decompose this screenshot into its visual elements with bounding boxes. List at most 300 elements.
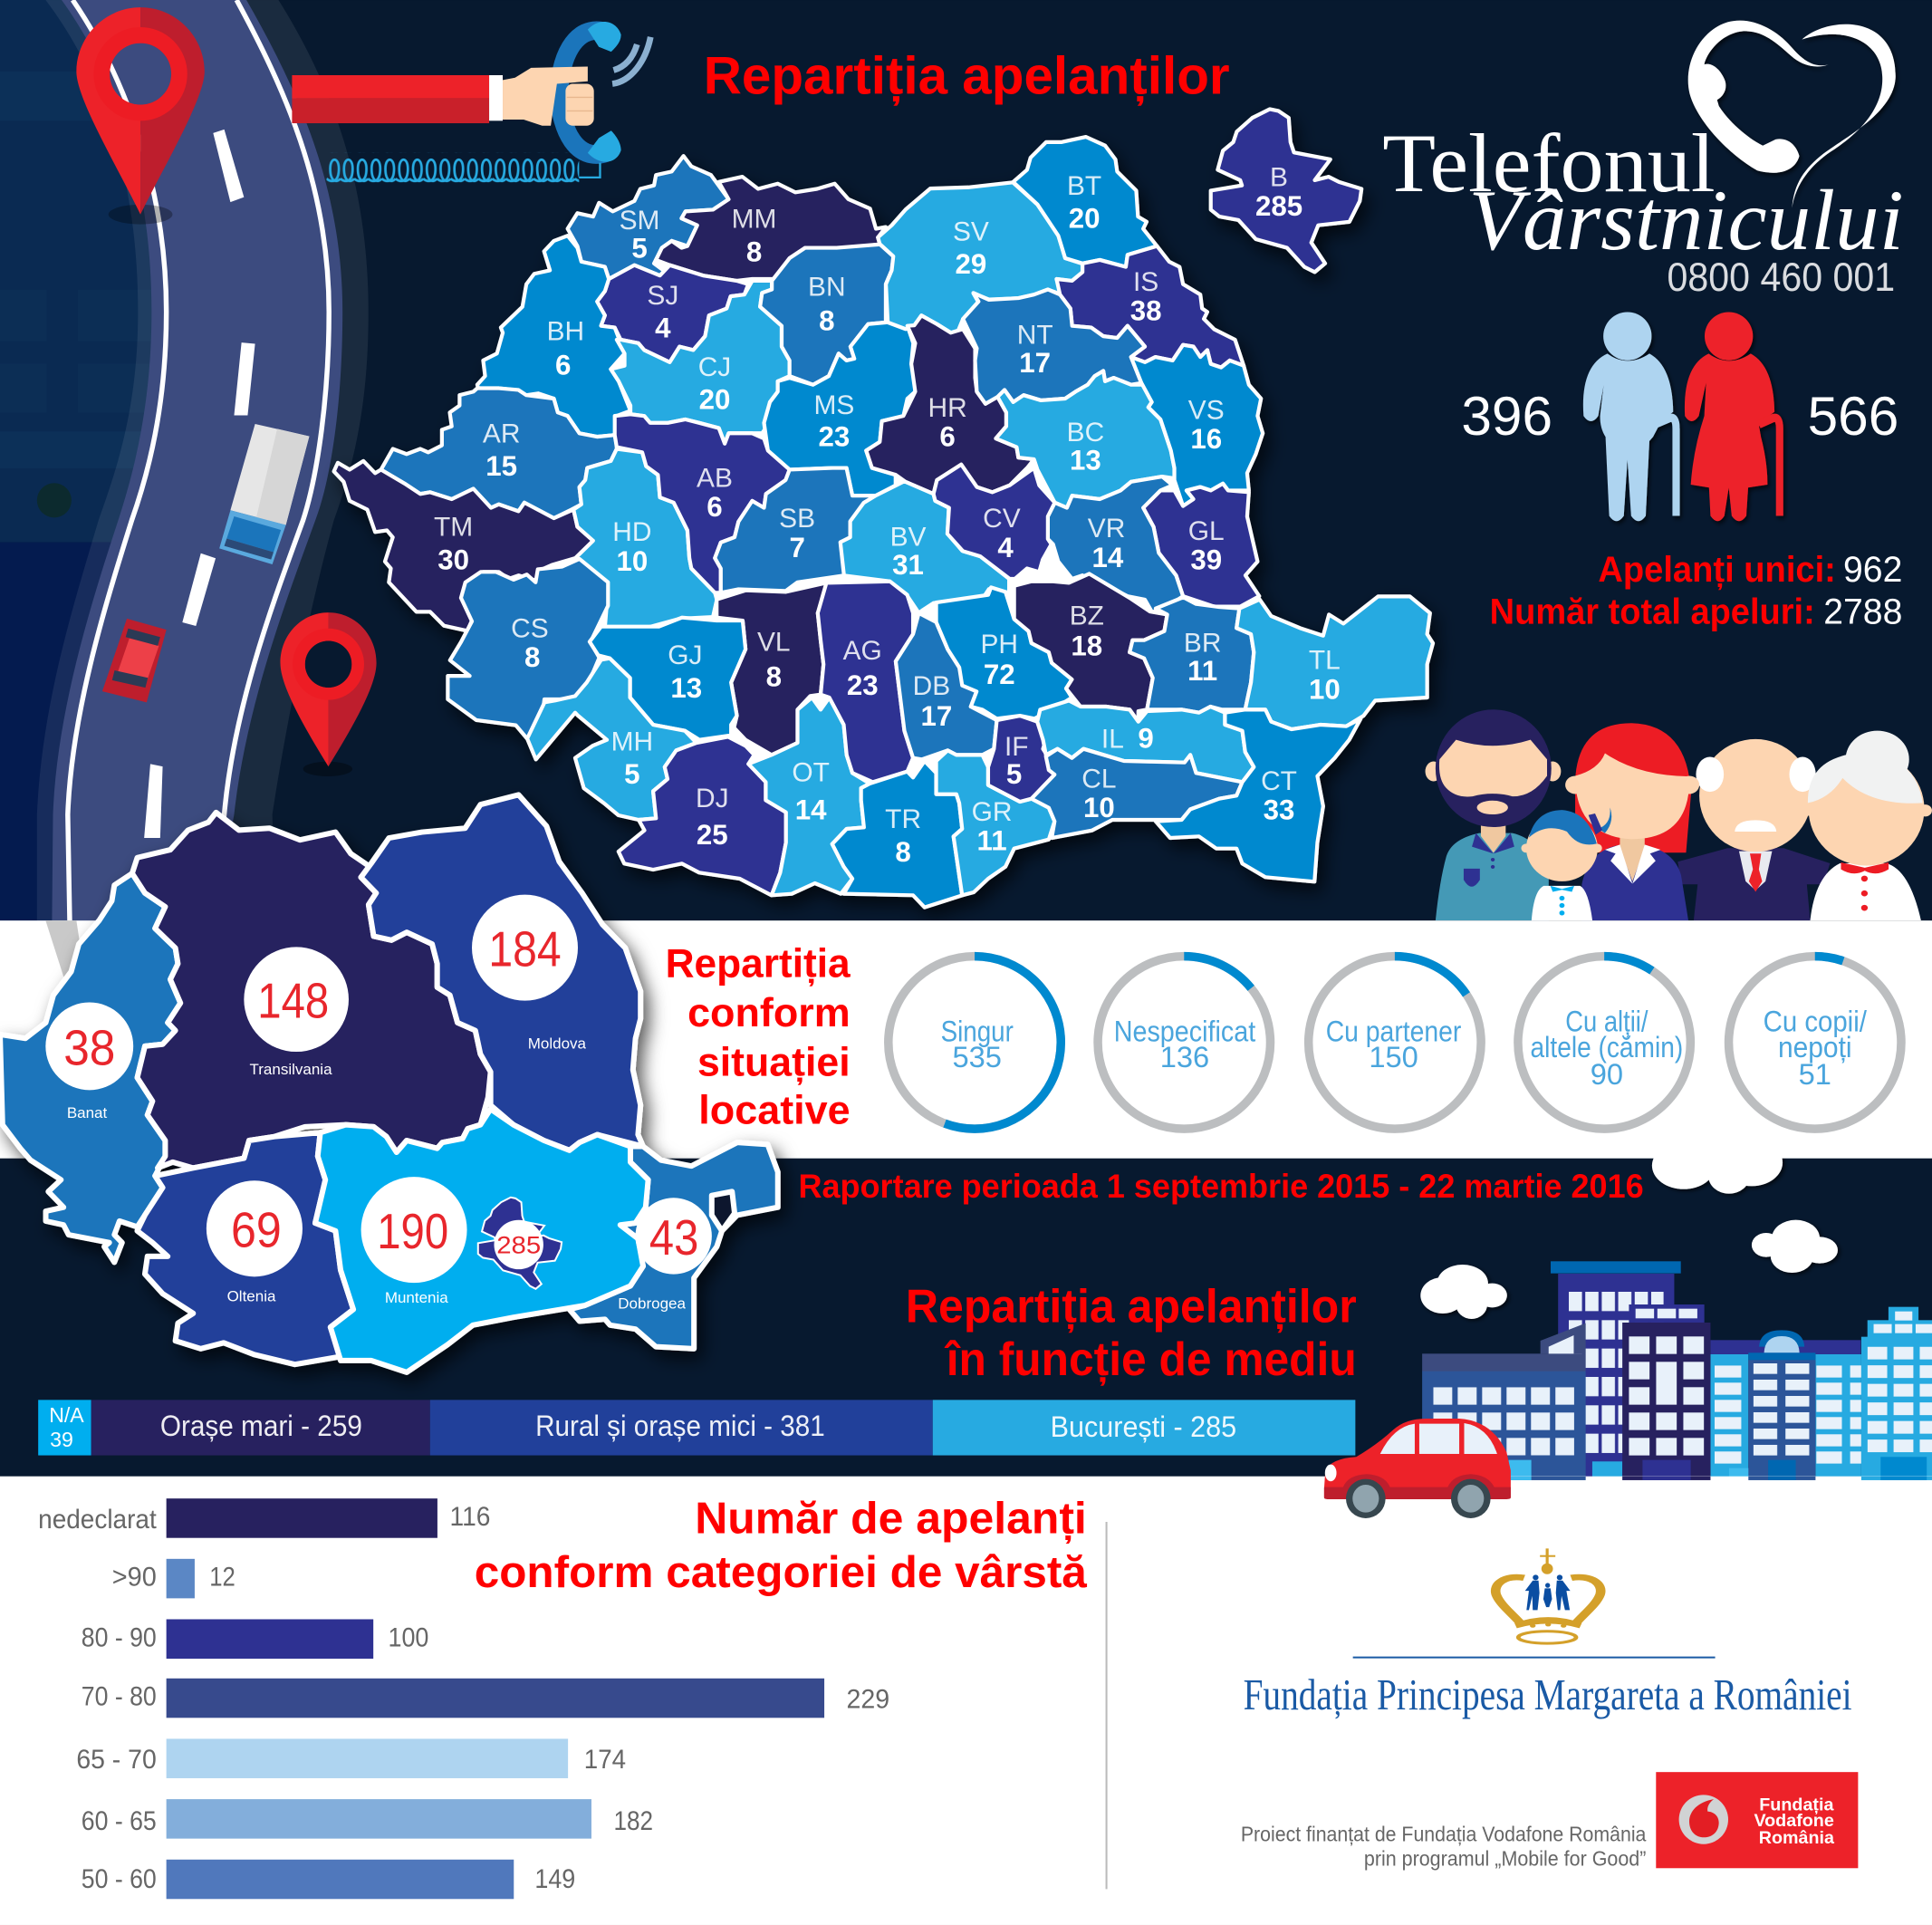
- county: VS: [1131, 345, 1263, 506]
- county: DB: [896, 613, 997, 759]
- region value: Dobrogea: Dobrogea: [618, 1295, 686, 1313]
- red haired woman: [1565, 723, 1699, 920]
- label: CS: CS: [511, 613, 549, 643]
- label: B: [1255, 162, 1302, 222]
- county: MM: [656, 177, 886, 281]
- label: HD: [612, 517, 651, 577]
- heading: housing situation: situației: [697, 1039, 851, 1085]
- bar: nedeclarat: [38, 1498, 490, 1538]
- label: BT: [1067, 171, 1101, 235]
- illustration: family group: [1426, 709, 1932, 920]
- logo: Vodafone foundation: [1656, 1772, 1858, 1868]
- label: MS: 23: [819, 420, 850, 452]
- county: GR: [937, 750, 1054, 895]
- county: SV: [878, 182, 1082, 332]
- icon: arm holding telephone: [292, 22, 650, 182]
- brand name: Telefonul: Telefonul: [1382, 118, 1716, 210]
- label: HD: 10: [616, 545, 648, 577]
- female caller count: 566: [1808, 386, 1898, 447]
- project credit: prin programul „Mobile for Good”: [1364, 1847, 1646, 1871]
- label: MH: 5: [624, 758, 640, 790]
- segment: Orase mari: [91, 1400, 430, 1456]
- region value: Moldova: Moldova: [528, 1035, 587, 1053]
- label: SJ: [647, 281, 678, 344]
- logo: Vodafone foundation: România: [1759, 1828, 1835, 1848]
- label: TR: TR: [885, 804, 921, 834]
- label: HR: 6: [939, 420, 956, 452]
- heading: housing situation: Repartiția: [666, 940, 851, 987]
- region value: Bucharest inset: 285: [496, 1230, 541, 1258]
- bar: 50-60: [82, 1860, 575, 1899]
- county: GJ: [590, 618, 745, 740]
- heading: housing situation: conform: [687, 989, 851, 1035]
- county: BT: [1014, 137, 1157, 267]
- county: CV: [934, 465, 1055, 579]
- label: AG: 23: [847, 669, 879, 701]
- county: GL: [1143, 484, 1259, 607]
- label: SJ: SJ: [647, 281, 678, 311]
- label: BN: BN: [808, 272, 846, 302]
- label: SB: SB: [779, 504, 815, 534]
- label: MH: [611, 727, 653, 790]
- map of Romania by county: [334, 109, 1433, 908]
- label: BC: 13: [1070, 444, 1101, 476]
- heading: callers by age: conform categoriei de vârstă: [475, 1548, 1088, 1597]
- label: CS: [511, 613, 549, 673]
- label: TM: [434, 513, 473, 575]
- region value: Dobrogea: [618, 1198, 712, 1313]
- region value: Oltenia: 69: [231, 1203, 282, 1258]
- label: CV: [983, 504, 1021, 563]
- environment bar: [38, 1400, 1355, 1456]
- county: BV: [841, 482, 1009, 613]
- county: TM: [334, 461, 593, 630]
- county: IL: [1037, 700, 1254, 782]
- label: AB: AB: [697, 463, 733, 493]
- label: SM: 5: [631, 232, 648, 264]
- ring: Cu copii: Cu copii/: [1764, 1005, 1868, 1038]
- child: [1522, 807, 1611, 920]
- region value: Dobrogea: 43: [649, 1210, 698, 1266]
- region value: Oltenia: Oltenia: [227, 1288, 276, 1305]
- county: CS: [447, 559, 608, 738]
- label: GR: GR: [972, 797, 1012, 827]
- stat: unique callers: Apelanți unici:: [1598, 550, 1836, 590]
- label: IL: 9: [1138, 723, 1154, 755]
- project credit: Proiect finanțat de Fundația Vodafone România: [1241, 1822, 1647, 1845]
- county: TR: [832, 761, 962, 908]
- label: BC: BC: [1067, 418, 1104, 448]
- stat: unique callers: 962: [1843, 550, 1902, 590]
- ring: Cu altii: altele (cămin): [1531, 1030, 1683, 1064]
- ring: Cu altii: 90: [1591, 1057, 1623, 1091]
- label: IS: IS: [1133, 267, 1158, 297]
- region value: Transilvania: Transilvania: [250, 1061, 332, 1078]
- bar: nedeclarat: 116: [450, 1502, 490, 1532]
- label: NT: 17: [1019, 347, 1051, 379]
- label: SB: 7: [789, 532, 805, 563]
- label: TL: [1309, 646, 1341, 705]
- segment: N/A: N/A: [49, 1403, 84, 1427]
- logo: heart with phone handset: [1688, 21, 1896, 208]
- label: SV: SV: [953, 217, 989, 246]
- segment: Orase mari: Orașe mari - 259: [160, 1409, 362, 1442]
- bar: nedeclarat: nedeclarat: [38, 1505, 157, 1535]
- label: BZ: BZ: [1070, 602, 1104, 631]
- heading: callers by environment: [906, 1280, 1357, 1386]
- label: AG: AG: [843, 636, 882, 666]
- label: BZ: [1070, 602, 1104, 662]
- bar: 50-60: 50 - 60: [82, 1864, 157, 1894]
- label: GL: 39: [1190, 544, 1222, 575]
- label: DB: DB: [913, 671, 950, 701]
- label: VS: [1188, 396, 1225, 455]
- county: IF: [988, 716, 1054, 802]
- label: CJ: [698, 352, 731, 416]
- label: VR: [1088, 514, 1125, 573]
- label: BV: BV: [890, 523, 927, 553]
- segment: Bucuresti: București - 285: [1051, 1410, 1236, 1443]
- label: IS: [1130, 267, 1161, 327]
- label: SM: SM: [620, 206, 659, 236]
- label: CJ: CJ: [698, 352, 731, 382]
- building: back strip: [1710, 1340, 1860, 1477]
- Razim lake notch: [712, 1191, 735, 1231]
- region value: Oltenia: [207, 1180, 303, 1305]
- phone number: 0800 460 001: [1668, 254, 1895, 300]
- label: SB: [779, 504, 815, 563]
- bar: over 90: 12: [209, 1563, 235, 1593]
- mini Bucharest shape: [478, 1198, 562, 1289]
- ring: Cu copii: [1729, 957, 1901, 1129]
- label: AB: 6: [706, 491, 723, 523]
- bar: 70-80: [82, 1679, 889, 1718]
- ring: Cu copii: 51: [1799, 1057, 1831, 1091]
- region value: Banat: 38: [63, 1020, 115, 1075]
- label: TR: [885, 804, 921, 868]
- label: GL: [1188, 516, 1225, 575]
- bar: 80-90: 100: [389, 1622, 428, 1652]
- label: VS: VS: [1188, 396, 1225, 426]
- label: TR: 8: [895, 836, 911, 868]
- heading: callers by environment: Repartiția apelanților: [906, 1280, 1357, 1333]
- county: BZ: [1014, 573, 1168, 722]
- county: PH: [937, 587, 1072, 718]
- label: BV: [890, 523, 927, 581]
- label: AG: [843, 636, 882, 701]
- stat: total calls: Număr total apeluri:: [1490, 592, 1815, 631]
- city backdrop behind road: [0, 0, 167, 924]
- bar: 80-90: 80 - 90: [82, 1622, 157, 1652]
- label: SM: [620, 206, 659, 264]
- region: Moldova: [361, 794, 643, 1150]
- red car on road: [102, 619, 167, 702]
- label: BT: 20: [1069, 203, 1100, 235]
- building: left block: [1422, 1323, 1586, 1480]
- label: AR: 15: [485, 450, 517, 482]
- label: TM: 30: [437, 544, 469, 575]
- regional map: [0, 794, 778, 1372]
- region: Oltenia: [138, 1132, 353, 1364]
- region value: Moldova: 184: [488, 922, 562, 977]
- region value: Muntenia: [361, 1177, 467, 1306]
- bar: 50-60: 149: [534, 1864, 575, 1894]
- label: IF: [1004, 732, 1029, 790]
- label: IS: 38: [1130, 295, 1161, 327]
- label: HD: HD: [612, 517, 651, 547]
- label: BH: BH: [547, 316, 584, 346]
- region value: Muntenia: 190: [377, 1204, 448, 1259]
- label: CL: 10: [1083, 792, 1115, 823]
- bar: over 90: >90: [112, 1563, 157, 1593]
- county: MH: [527, 659, 697, 820]
- county: IS: [1056, 246, 1244, 368]
- region value: Moldova: [472, 895, 587, 1053]
- county: TL: [1236, 596, 1433, 729]
- ring: Cu partener: 150: [1369, 1040, 1418, 1073]
- label: TL: TL: [1309, 646, 1341, 676]
- label: AR: [483, 419, 520, 482]
- ring: Cu altii: Cu alții/: [1565, 1005, 1648, 1038]
- region value: Muntenia: Muntenia: [385, 1289, 448, 1306]
- ring: Singur: Singur: [941, 1014, 1014, 1047]
- building: domed tower: [1748, 1330, 1861, 1480]
- label: SJ: 4: [655, 313, 671, 344]
- label: GJ: 13: [670, 672, 702, 704]
- label: OT: OT: [792, 757, 830, 787]
- bar: 65-70: 174: [584, 1745, 626, 1775]
- region value: Banat: Banat: [67, 1104, 108, 1121]
- label: MM: MM: [732, 205, 776, 235]
- truck on road: [219, 424, 309, 564]
- label: DB: 17: [920, 700, 952, 732]
- ring: Singur: [889, 957, 1061, 1129]
- bearded man: [1426, 709, 1561, 920]
- bar: over 90: [112, 1559, 235, 1598]
- label: VR: 14: [1092, 542, 1124, 573]
- label: HR: [928, 393, 967, 452]
- region value: Bucharest inset: [494, 1220, 543, 1269]
- map pin large: [76, 7, 205, 225]
- label: BT: BT: [1067, 171, 1101, 201]
- label: IF: IF: [1004, 732, 1029, 762]
- label: CT: [1261, 766, 1297, 826]
- county: SB: [715, 468, 876, 592]
- label: OT: [792, 757, 830, 826]
- label: PH: [980, 630, 1018, 690]
- male caller count: 396: [1461, 386, 1552, 447]
- county: CT: [1156, 709, 1360, 881]
- label: BV: 31: [892, 549, 924, 581]
- region: Banat: [0, 873, 180, 1262]
- bar: 60-65: [82, 1799, 653, 1839]
- county: VL: [716, 582, 826, 755]
- label: HR: HR: [928, 393, 967, 423]
- road fade on white band: [45, 920, 86, 986]
- ring: Cu altii: [1518, 957, 1690, 1129]
- cloud top: [1652, 1135, 1783, 1194]
- county: AB: [615, 414, 790, 592]
- building: navy tower: [1622, 1304, 1710, 1480]
- cloud left: [1420, 1265, 1507, 1319]
- building: back tower: [1551, 1261, 1681, 1477]
- label: MM: 8: [746, 236, 762, 267]
- ring: Nespecificat: Nespecificat: [1114, 1014, 1255, 1047]
- label: PH: PH: [980, 630, 1018, 659]
- heading: callers by environment: în funcție de mediu: [944, 1333, 1357, 1386]
- label: BC: [1067, 418, 1104, 476]
- county: VR: [1048, 476, 1183, 611]
- label: GR: [972, 797, 1012, 857]
- county: HR: [866, 315, 1034, 494]
- label: SV: 29: [956, 248, 986, 280]
- icon: elderly man and woman: [1583, 312, 1780, 521]
- old man: [1677, 739, 1830, 920]
- segment: Rural: Rural și orașe mici - 381: [535, 1409, 825, 1442]
- label: BZ: 18: [1071, 630, 1102, 662]
- county: BN: [760, 245, 894, 385]
- county: AR: [381, 389, 617, 518]
- label: VL: 8: [766, 661, 782, 693]
- label: TM: TM: [434, 513, 473, 543]
- label: DJ: 25: [697, 819, 728, 851]
- ring: Singur: 535: [953, 1040, 1002, 1073]
- icon: red car: [1324, 1419, 1511, 1518]
- region: Transilvania: [132, 813, 491, 1168]
- label: CV: CV: [983, 504, 1021, 534]
- cloud right: [1752, 1220, 1838, 1273]
- bar: 65-70: [76, 1738, 626, 1778]
- label: IF: 5: [1006, 758, 1022, 790]
- label: TL: 10: [1309, 673, 1341, 705]
- bar: 60-65: 60 - 65: [82, 1806, 157, 1836]
- county: BC: [995, 371, 1175, 508]
- label: GJ: GJ: [668, 640, 702, 670]
- label: B: B: [1270, 162, 1288, 192]
- segment: N/A: 39: [50, 1428, 73, 1451]
- bar: 60-65: 182: [613, 1806, 653, 1836]
- county: SM: [568, 156, 728, 279]
- reporting period: Raportare perioada 1 septembrie 2015 - 22 martie 2016: [798, 1168, 1644, 1205]
- label: VL: [757, 627, 791, 693]
- county: CJ: [610, 281, 790, 444]
- label: CT: 33: [1264, 794, 1294, 826]
- region value: Transilvania: 148: [257, 974, 329, 1029]
- heading: callers by age: [475, 1494, 1088, 1597]
- county: OT: [748, 698, 870, 895]
- label: IL: IL: [1101, 725, 1124, 755]
- region: Muntenia: [315, 1109, 649, 1372]
- label: CS: 8: [524, 641, 540, 673]
- label: CL: [1081, 764, 1117, 823]
- ring: Nespecificat: 136: [1160, 1040, 1209, 1073]
- bar: 70-80: 229: [847, 1684, 889, 1714]
- region value: Banat: [45, 1003, 133, 1121]
- label: NT: NT: [1017, 321, 1053, 351]
- white band: housing situation: [0, 920, 1932, 1159]
- label: NT: [1017, 321, 1053, 379]
- white footer panel: [0, 1477, 1932, 1925]
- city skyline: [1420, 1220, 1932, 1480]
- county: MS: [764, 322, 915, 496]
- label: CV: 4: [997, 532, 1014, 563]
- logo: Vodafone foundation: Vodafone: [1754, 1811, 1834, 1831]
- label: AB: [697, 463, 733, 523]
- logo: crown: [1495, 1548, 1600, 1643]
- segment: Bucuresti: [933, 1400, 1355, 1456]
- county: BR: [1129, 598, 1254, 713]
- county: NT: [963, 289, 1145, 404]
- region: Dobrogea: [570, 1142, 778, 1349]
- label: MM: [732, 205, 776, 267]
- county: DJ: [619, 736, 786, 895]
- city ground cover: [1422, 1477, 1932, 1480]
- county: HD: [573, 449, 716, 628]
- heading: housing situation: locative: [698, 1087, 851, 1133]
- label: SV: [953, 217, 989, 280]
- label: MS: [814, 390, 854, 452]
- label: BN: [808, 272, 846, 337]
- label: VL: VL: [757, 627, 791, 657]
- heading: housing situation: [666, 940, 851, 1133]
- label: BH: 6: [555, 350, 571, 381]
- bar chart: callers by age: [38, 1498, 889, 1899]
- county labels: [434, 162, 1341, 868]
- bar: 70-80: 70 - 80: [82, 1682, 157, 1712]
- title: Repartiția apelanților: [704, 46, 1230, 106]
- county: B (Bucharest): [1211, 109, 1361, 272]
- project credit: [1241, 1822, 1647, 1871]
- map pin small: [280, 612, 377, 776]
- heading: callers by age: Număr de apelanți: [695, 1494, 1087, 1543]
- label: B: 285: [1255, 190, 1302, 222]
- ring: Cu partener: [1309, 957, 1481, 1129]
- label: GJ: [668, 640, 702, 704]
- label: VR: VR: [1088, 514, 1125, 544]
- label: BH: [547, 316, 584, 381]
- label: CL: CL: [1081, 764, 1117, 794]
- label: BR: 11: [1187, 655, 1217, 687]
- label: BR: [1184, 629, 1221, 687]
- label: OT: 14: [795, 794, 827, 826]
- county: AG: [818, 582, 913, 782]
- stat: total calls: 2788: [1823, 592, 1902, 631]
- label: MH: MH: [611, 727, 653, 756]
- label: IL: [1101, 723, 1154, 755]
- county: BH: [477, 236, 630, 437]
- brand name: Vârstnicului: Vârstnicului: [1469, 172, 1904, 268]
- label: GL: GL: [1188, 516, 1225, 546]
- logo: Vodafone foundation: Fundația: [1759, 1795, 1834, 1814]
- label: AR: AR: [483, 419, 520, 448]
- label: DJ: DJ: [696, 784, 729, 813]
- label: VS: 16: [1190, 423, 1222, 455]
- ring: Cu partener: Cu partener: [1326, 1014, 1461, 1047]
- segment: N/A: [38, 1400, 91, 1456]
- label: CJ: 20: [699, 384, 730, 416]
- label: BN: 8: [819, 305, 834, 337]
- bar: 80-90: [82, 1619, 428, 1659]
- label: GR: 11: [977, 825, 1007, 857]
- label: DJ: [696, 784, 729, 851]
- label: MS: MS: [814, 390, 854, 420]
- road: [37, 0, 369, 948]
- old woman: [1799, 731, 1932, 920]
- region value: Transilvania: [244, 947, 349, 1078]
- label: BR: BR: [1184, 629, 1221, 659]
- segment: Rural: [430, 1400, 933, 1456]
- label: CT: CT: [1261, 766, 1297, 796]
